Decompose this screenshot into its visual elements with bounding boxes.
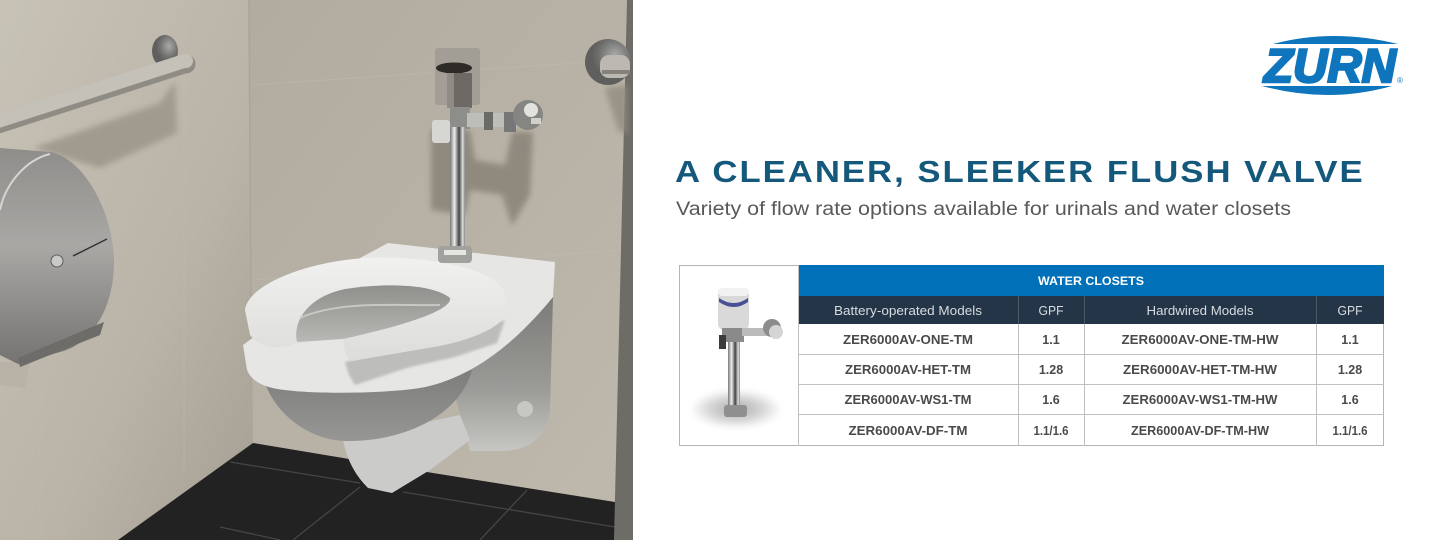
row 1 [843, 333, 1359, 347]
grab bar shadow [33, 82, 177, 168]
partition edge [614, 0, 633, 540]
right panel background [633, 0, 1440, 540]
grab bar [0, 35, 186, 125]
row 2: ZER6000AV-HET-TM-HW [1123, 363, 1277, 377]
subheading: Variety of flow rate options available for urinals and water closets [676, 199, 1291, 220]
corner shadow [249, 0, 252, 445]
row 2: ZER6000AV-HET-TM [845, 363, 971, 377]
right grab bar flange [585, 39, 631, 135]
row 1: ZER6000AV-ONE-TM-HW [1122, 333, 1279, 347]
flush valve base [438, 246, 472, 263]
blue header band: WATER CLOSETS [1038, 274, 1144, 288]
table frame [680, 266, 1384, 446]
column headers: GPF [1038, 304, 1064, 318]
row 3: 1.6 [1341, 393, 1359, 407]
wall hanger [440, 297, 553, 451]
row 4: 1.1/1.6 [1034, 424, 1069, 438]
row 1: 1.1 [1042, 333, 1060, 347]
left wall [0, 0, 252, 540]
row 3: ZER6000AV-WS1-TM-HW [1122, 393, 1278, 407]
floor tiles [118, 443, 615, 540]
row 4: ZER6000AV-DF-TM-HW [1131, 424, 1269, 438]
column headers [798, 296, 1384, 324]
rim [243, 243, 555, 393]
row 3: 1.6 [1042, 393, 1060, 407]
row 1: 1.1 [1341, 333, 1359, 347]
right wall [248, 0, 630, 510]
row 3: ZER6000AV-WS1-TM [844, 393, 972, 407]
logo: Zurn: ZURN [1262, 39, 1397, 92]
row 1: ZER6000AV-ONE-TM [843, 333, 973, 347]
bowl [264, 370, 472, 441]
paper dispenser [0, 148, 114, 388]
column headers: GPF [1338, 304, 1363, 318]
row 4: 1.1/1.6 [1332, 424, 1368, 438]
blue header band [798, 265, 1384, 296]
row 2: 1.28 [1039, 363, 1063, 377]
logo: Zurn: ® [1397, 76, 1403, 85]
product image: flush valve [690, 288, 783, 429]
row 3 [844, 393, 1359, 407]
flush valve [432, 48, 543, 247]
seat [245, 258, 505, 361]
flush valve shadow [431, 130, 533, 226]
row 4: ZER6000AV-DF-TM [848, 424, 968, 438]
column headers: Hardwired Models [1146, 303, 1254, 318]
row 2 [845, 363, 1362, 377]
row 2: 1.28 [1338, 363, 1362, 377]
lower trap [343, 415, 470, 493]
table grid [798, 265, 1384, 446]
column headers: Battery-operated Models [834, 303, 983, 318]
table: water closets [680, 265, 1384, 446]
photo: restroom with wall-hung toilet and flush valve [0, 0, 633, 540]
hanger bolt cap [517, 401, 533, 417]
row 4 [848, 424, 1368, 438]
heading: A CLEANER, SLEEKER FLUSH VALVE [675, 154, 1363, 189]
